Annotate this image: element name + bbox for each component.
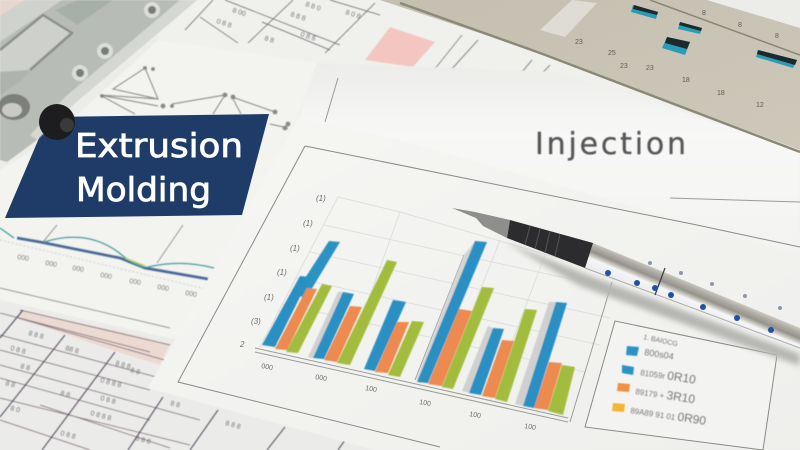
ruler scale numbers: 23 xyxy=(646,65,654,72)
bottom-left data table: 0 8 8 xyxy=(99,395,116,406)
left sheet with network diagram: 000 xyxy=(129,278,141,287)
y-axis labels xyxy=(239,194,326,349)
metal bracket xyxy=(0,0,197,162)
left sheet with network diagram xyxy=(0,40,317,390)
bottom-left data table: 8 0 xyxy=(9,405,21,414)
left sheet with network diagram: 000 xyxy=(185,290,197,299)
top drawing sheet with table: 0 8 8 xyxy=(299,31,316,43)
bottom-left data table: 8 8 xyxy=(129,367,141,376)
bottom-left data table: 0 8 8 xyxy=(9,345,26,356)
pink table cell xyxy=(365,27,435,67)
bottom-left data table: 8 8 xyxy=(169,400,181,409)
y-axis labels: (1) xyxy=(316,194,326,203)
top drawing sheet with table: 8 8 xyxy=(263,35,275,45)
top drawing sheet with table: 8 8 0 xyxy=(304,1,321,13)
legend: 1. BAIOCG xyxy=(643,334,678,348)
ruler scale numbers: 23 xyxy=(620,63,628,70)
x-axis labels: 100 xyxy=(524,423,536,432)
left sheet with network diagram: 000 xyxy=(72,265,84,274)
left sheet with network diagram: 000 xyxy=(100,272,112,281)
x-axis labels: 000 xyxy=(261,363,273,372)
ruler scale numbers: 18 xyxy=(682,77,690,84)
y-axis labels: (1) xyxy=(303,219,313,228)
ruler scale numbers: 8 xyxy=(775,33,779,40)
label panel: Extrusion Molding xyxy=(5,114,269,218)
x-axis labels: 000 xyxy=(315,374,327,383)
bottom-left data table: 88 8 xyxy=(64,345,80,355)
x-axis labels xyxy=(261,363,536,432)
top drawing sheet with table: 8 0 8 xyxy=(344,9,361,21)
bottom-left data table: 8 8 8 xyxy=(27,330,44,341)
bracket holes xyxy=(144,2,160,18)
x-axis labels: 100 xyxy=(365,385,377,394)
front sheet with bar chart xyxy=(148,118,800,450)
bottom-left data table: 0 8 8 xyxy=(59,430,76,441)
pen xyxy=(452,208,800,366)
ruler xyxy=(380,0,800,152)
heading: Injection: Injection xyxy=(535,127,686,162)
bottom-left data table: 0 8 8 8 xyxy=(89,410,112,422)
ruler scale numbers xyxy=(575,10,779,109)
y-axis labels: (1) xyxy=(264,293,274,302)
bottom-left data table: 8 8 xyxy=(19,363,31,372)
pen dots xyxy=(605,270,774,333)
grid lines xyxy=(260,197,620,400)
bottom-left data table: 8 8 8 xyxy=(134,435,151,446)
y-axis labels: 2 xyxy=(239,340,245,349)
ruler scale numbers: 12 xyxy=(756,102,764,109)
legend: 81059r 0R10 xyxy=(640,364,697,387)
top drawing sheet with table: 0 8 8 xyxy=(215,18,232,30)
x-axis labels: 100 xyxy=(419,399,431,408)
y-axis labels: (1) xyxy=(277,268,287,277)
legend xyxy=(585,321,777,450)
x-axis labels: 100 xyxy=(469,411,481,420)
top drawing sheet with table xyxy=(150,0,800,160)
bottom-left data table: 8 8 xyxy=(59,390,71,399)
label panel: Extrusion Molding: Molding xyxy=(76,170,211,209)
legend: 89179 + 3R10 xyxy=(635,383,696,406)
label panel: Extrusion Molding: Extrusion xyxy=(75,126,243,165)
chart frame xyxy=(178,146,800,447)
bottom-left data table: 0 8 8 8 xyxy=(99,377,122,389)
top drawing sheet with table: 8 8 8 xyxy=(289,11,306,23)
ruler scale numbers: 18 xyxy=(717,90,725,97)
left sheet with network diagram: 000 xyxy=(45,260,57,269)
legend: 89A89 91 01 0R90 xyxy=(630,402,707,428)
black knob xyxy=(39,104,75,140)
bottom-left data table: 8 8 8 xyxy=(224,420,241,431)
ruler scale numbers: 25 xyxy=(608,50,616,57)
left sheet with network diagram: 000 xyxy=(17,254,29,263)
injection sheet xyxy=(298,63,800,270)
y-axis labels: (1) xyxy=(290,244,300,253)
bars xyxy=(262,241,575,415)
bottom-left data table xyxy=(0,300,375,450)
ruler scale numbers: 8 xyxy=(702,10,706,17)
ruler scale numbers: 23 xyxy=(575,39,583,46)
line chart strip xyxy=(0,225,235,328)
y-axis labels: (3) xyxy=(251,317,261,326)
bottom-left data table: 8 8 8 xyxy=(114,360,131,371)
top drawing sheet with table: 8 00 xyxy=(231,7,247,18)
left sheet with network diagram: 000 xyxy=(157,284,169,293)
bottom-left data table: 8 8 xyxy=(4,380,16,389)
legend: 800s04 xyxy=(644,347,674,362)
ruler scale numbers: 8 xyxy=(738,22,742,29)
ruler windows xyxy=(631,5,797,68)
